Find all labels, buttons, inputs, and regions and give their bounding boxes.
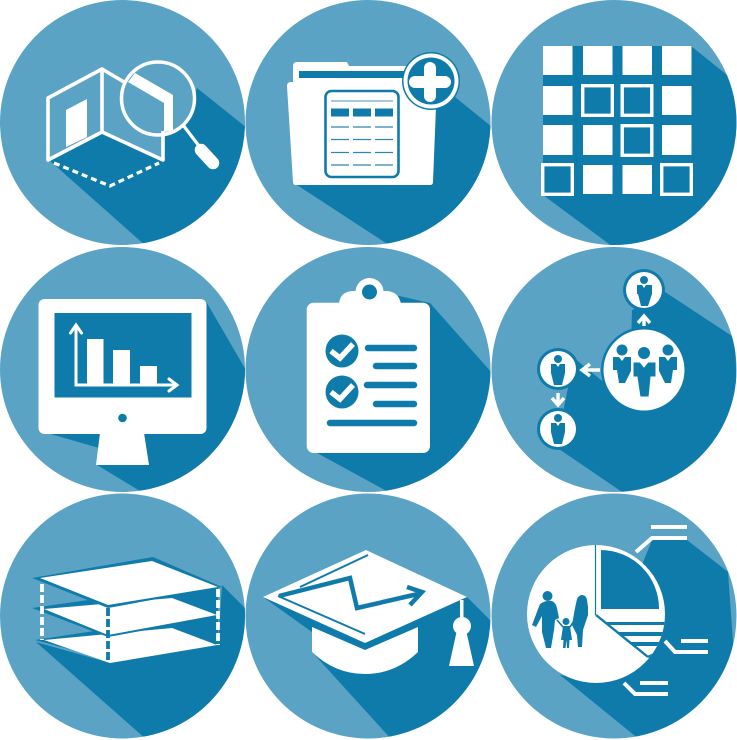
room door — [66, 99, 87, 147]
icon circle: folder with table and plus — [246, 0, 492, 247]
bottom person circle — [537, 408, 579, 450]
arrows — [552, 316, 650, 405]
top layer — [32, 557, 222, 608]
left person circle — [537, 348, 579, 390]
icon circle: stacked layers — [0, 494, 247, 740]
top person circle — [623, 269, 665, 311]
table — [326, 91, 398, 177]
callout lines — [624, 527, 708, 694]
room walls — [48, 69, 163, 160]
plus badge — [402, 52, 460, 110]
wall seen through lens — [128, 73, 173, 132]
pie chart — [527, 545, 670, 683]
middle layer — [32, 586, 218, 637]
monitor body — [38, 299, 206, 434]
icon circle: calendar grid — [492, 0, 737, 247]
clipboard board — [307, 303, 430, 453]
icon circle: room plan under magnifier — [0, 0, 247, 247]
icon circle: clipboard checklist — [246, 247, 492, 494]
second checkmark — [326, 376, 358, 408]
monitor stand — [96, 433, 149, 465]
tassel — [449, 600, 474, 666]
icon circle: monitor with bar chart — [0, 247, 247, 494]
grid squares — [543, 46, 692, 194]
magnifier lens — [122, 62, 194, 135]
trend arrow — [279, 578, 422, 608]
list lines — [330, 348, 414, 423]
family silhouettes — [532, 591, 588, 648]
clipboard clip — [339, 278, 401, 306]
first checkmark — [326, 334, 358, 368]
magnifier handle — [183, 125, 213, 163]
outlined squares — [543, 86, 691, 194]
icon circle: graduation cap — [246, 494, 492, 740]
folder front — [287, 82, 437, 185]
dashed floor outline — [54, 163, 159, 186]
bottom layer — [35, 616, 218, 663]
mortarboard — [263, 550, 467, 643]
board rim lines — [278, 555, 368, 634]
icon circle: people network — [492, 247, 737, 494]
folder back tab — [293, 62, 415, 84]
chart axes — [70, 325, 177, 391]
dashed edges — [42, 584, 218, 663]
screen — [54, 313, 192, 398]
power button — [118, 414, 127, 422]
chart bars — [87, 339, 157, 384]
group circle — [601, 327, 687, 413]
cap base — [312, 627, 418, 674]
icon circle: pie chart with family — [492, 494, 737, 740]
